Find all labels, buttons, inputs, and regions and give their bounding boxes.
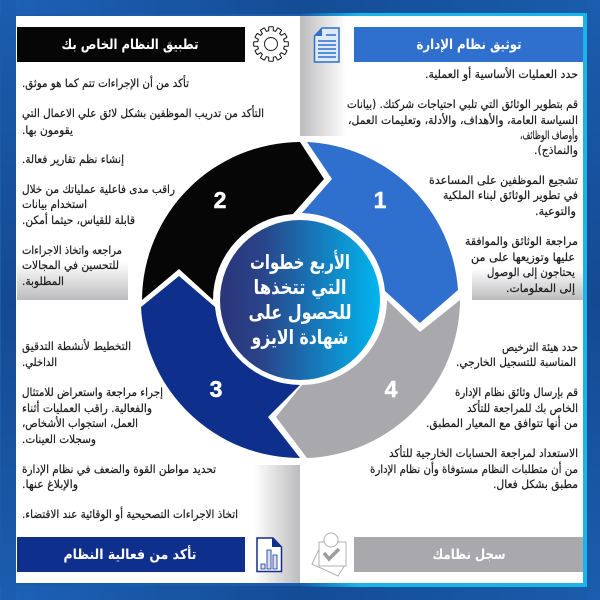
text: step 4: الاستعداد لمراجعة الحسابات الخارجية للتأكد <box>389 445 578 461</box>
text: step 4: من أن متطلبات النظام مستوفاة وأن نظام الإدارة <box>370 461 578 477</box>
center title: للحصول على <box>248 300 352 324</box>
center title <box>248 249 352 349</box>
text: step 4: من أنها تتوافق مع المعيار المطبق. <box>426 415 578 431</box>
text: step 4 <box>370 340 578 492</box>
text: step 2: التأكد من تدريب الموظفين بشكل لائق علي الاعمال التي <box>22 105 264 121</box>
header: step 2: تطبيق النظام الخاص بك <box>62 37 198 53</box>
text: step 2: مراجعه واتخاذ الاجراءات <box>22 243 122 258</box>
number 1: 1 <box>374 187 387 213</box>
text: step 2: راقب مدى فاعلية عملياتك من خلال <box>22 182 175 197</box>
text: step 3: الداخلي. <box>22 355 57 369</box>
header: step 3: تأكد من فعالية النظام <box>64 545 196 563</box>
text: step 1: عليها وتوزيعها على من <box>471 250 575 265</box>
text: step 4: المناسبة للتسجيل الخارجي. <box>456 355 576 370</box>
segment 3 <box>141 276 300 458</box>
segment 1 <box>302 142 458 323</box>
segment 2 <box>142 142 324 300</box>
icon: gear <box>253 26 289 62</box>
text: step 1: تشجيع الموظفين على المساعدة <box>429 173 578 188</box>
text: step 1: مراجعة الوثائق والموافقة <box>465 234 578 249</box>
text: step 1: حدد العمليات الأساسية أو العملية. <box>425 66 578 82</box>
text: step 3: والإبلاغ عنها. <box>22 477 78 492</box>
text: step 4: حدد هيئة الترخيص <box>502 340 578 355</box>
text: step 3 <box>22 339 238 522</box>
text: step 2: المطلوبة. <box>22 274 64 289</box>
center circle <box>220 220 380 380</box>
center title: الأربع خطوات <box>250 249 350 274</box>
segment 4 <box>276 300 460 458</box>
text: step 3: اتخاذ الاجراءات التصحيحية أو الوقائية عند الاقتضاء. <box>22 506 238 522</box>
text: step 2: قابلة للقياس، حيثما أمكن. <box>22 212 135 228</box>
text: step 2: تأكد من أن الإجراءات تتم كما هو موثق. <box>22 75 189 91</box>
header: step 1 <box>354 27 583 62</box>
icon: checklist <box>312 533 346 576</box>
text: step 3: وسجلات العينات. <box>22 432 96 447</box>
text: step 1 <box>347 66 578 296</box>
text: step 2 <box>22 75 264 289</box>
text: step 1: قم بتطوير الوثائق التي تلبي احتياجات شركتك. (بيانات <box>347 97 578 112</box>
text: step 4: مطبق بشكل فعال. <box>493 477 578 492</box>
text: step 2: إنشاء نظم تقارير فعالة. <box>22 152 124 167</box>
text: step 1: والنماذج). <box>534 143 578 158</box>
header: step 4: سجل نظامك <box>432 547 506 563</box>
header: step 2 <box>17 27 245 62</box>
text: step 2: يقومون بها. <box>22 123 73 138</box>
text: step 1: في تطوير الوثائق لبناء الملكية <box>443 188 578 203</box>
text: step 3: العمل، استجواب الأشخاص، <box>22 416 138 431</box>
cycle diagram <box>141 142 460 458</box>
number 3: 3 <box>210 376 222 402</box>
text: step 3: إجراء مراجعة واستعراض للامتثال <box>22 385 163 400</box>
icon: bar chart document <box>257 538 282 572</box>
text: step 3: والفعالية. راقب العمليات أثناء <box>22 400 152 416</box>
header: step 1: توثيق نظام الإدارة <box>416 37 522 53</box>
number 2: 2 <box>214 187 226 213</box>
center title: التي تتخذها <box>254 275 346 300</box>
text: step 4: الخاص بك للمراجعة للتأكد <box>467 400 578 416</box>
text: step 1: والتوعية. <box>535 204 576 219</box>
text: step 4: قم بإرسال وثائق نظام الإدارة <box>455 385 578 400</box>
text: step 2: للتحسين في المجالات <box>22 258 119 273</box>
text: step 3: التخطيط لأنشطة التدقيق <box>22 339 131 354</box>
header: step 3 <box>17 537 245 572</box>
text: step 1: السياسة العامة، والأهداف، والأدلة، وتعليمات العمل، <box>348 113 578 128</box>
icon: document <box>314 28 339 62</box>
text: step 3: تحديد مواطن القوة والضعف في نظام الإدارة <box>22 462 216 477</box>
text: step 2: استخدام بيانات <box>22 197 87 211</box>
header: step 4 <box>354 537 583 572</box>
center title: شهادة الايزو <box>251 325 348 349</box>
text: step 1: يحتاجون إلى الوصول <box>487 265 575 280</box>
text: step 1: إلى المعلومات. <box>506 281 575 296</box>
number 4: 4 <box>385 376 398 402</box>
